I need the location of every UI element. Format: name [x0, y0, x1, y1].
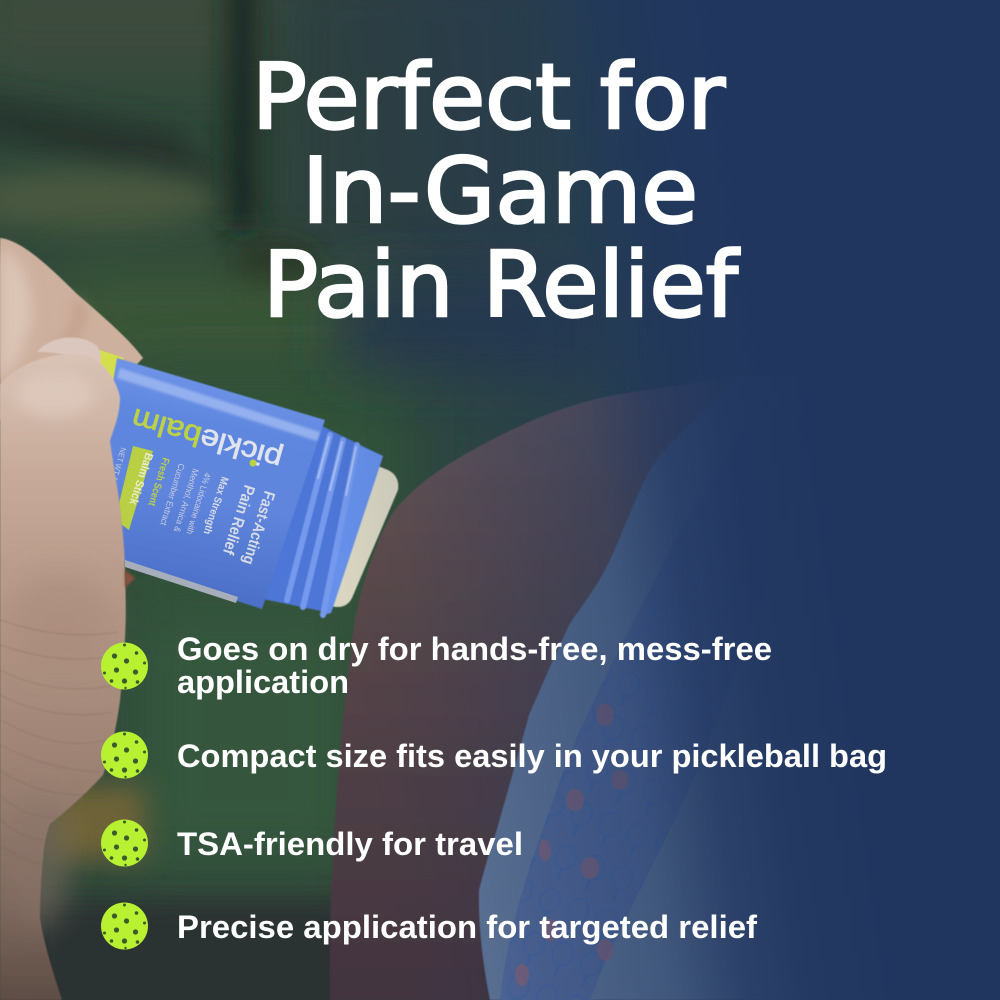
icon: pickleball [101, 642, 148, 690]
benefit: goes on dry [101, 631, 772, 700]
title: In-Game [302, 139, 698, 244]
benefit: TSA-friendly [101, 820, 523, 866]
product copy: Max Strength [201, 475, 231, 536]
hand: index finger [0, 238, 143, 420]
benefit: compact size [101, 732, 887, 778]
product copy: Cucumber Extract [158, 462, 187, 527]
icon: pickleball [101, 732, 148, 778]
stick body [100, 358, 325, 609]
logo: picklebalm: picklebalm [128, 402, 286, 475]
hand: thumb nail [37, 337, 101, 364]
text: Goes on dry for hands-free, mess-free [177, 631, 772, 667]
balm stick tag [115, 446, 153, 530]
yellow base cap [100, 350, 124, 382]
product copy: NET WT 1 oz [107, 446, 128, 491]
title: Perfect for [252, 45, 725, 150]
finger shadow below stick [125, 570, 135, 588]
product copy: Fast-Acting [239, 489, 277, 566]
icon: pickleball [101, 902, 148, 950]
label strip [125, 560, 238, 603]
product copy: Fresh Scent [145, 456, 172, 508]
title [252, 45, 740, 338]
product copy: Balm Stick [126, 451, 155, 507]
threaded neck [258, 426, 383, 615]
shoulder [330, 376, 900, 1000]
sleeve [479, 376, 1000, 1000]
product copy: 4% Lidocaine with [184, 471, 213, 536]
text: TSA-friendly for travel [177, 826, 523, 862]
balm tip [330, 466, 398, 607]
text: Precise application for targeted relief [177, 909, 757, 945]
balm stick [100, 350, 398, 615]
hand: thumb and wrist [0, 354, 126, 1000]
icon: pickleball [101, 820, 148, 866]
title: Pain Relief [263, 233, 740, 338]
product copy: Menthol, Arnica & [172, 467, 201, 533]
text: Compact size fits easily in your pickleball bag [177, 738, 887, 774]
product copy: Pain Relief [219, 483, 257, 557]
reddish paddles [515, 704, 628, 986]
highlight band [117, 368, 320, 441]
benefit: precise application [101, 902, 757, 950]
product copy [107, 446, 277, 566]
text: application [177, 664, 349, 700]
